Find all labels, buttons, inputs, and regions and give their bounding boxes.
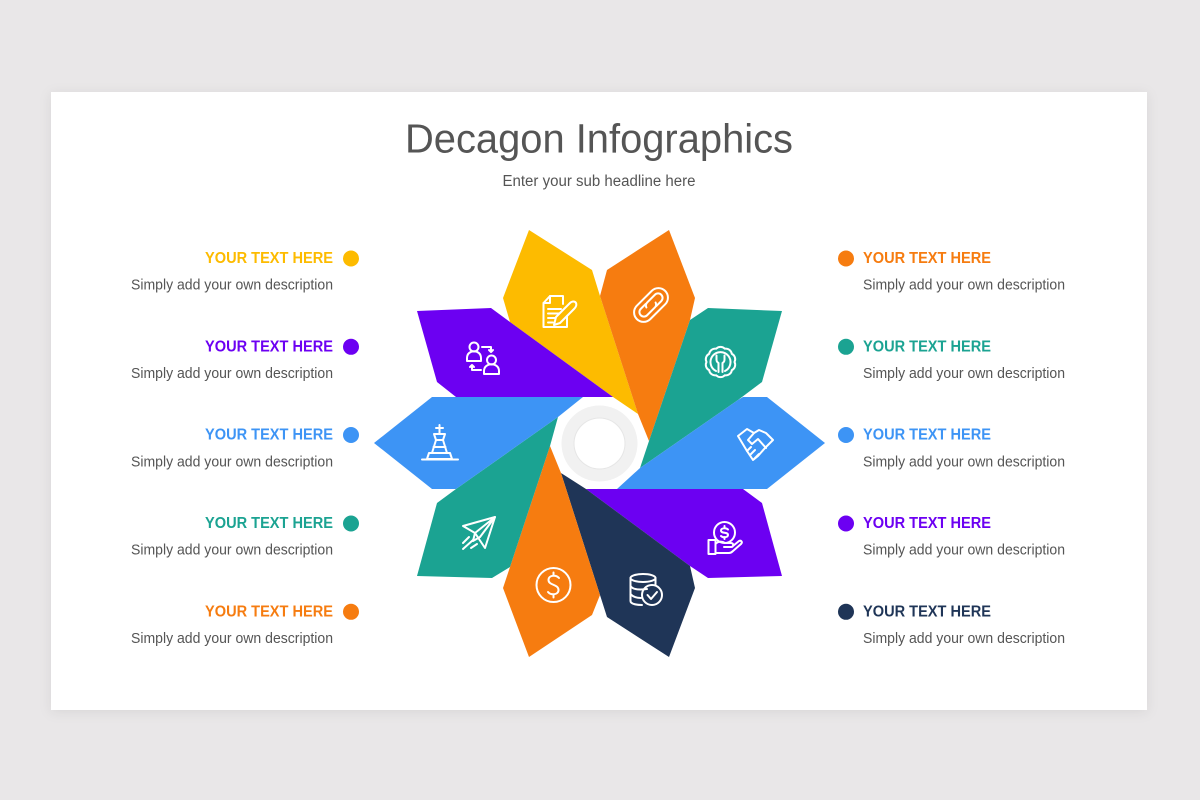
petal: purple upper left <box>417 308 613 397</box>
list item: right 4: Simply add your own description <box>863 542 1065 558</box>
list item: right 1: YOUR TEXT HERE <box>863 250 991 267</box>
petal: yellow <box>503 230 638 414</box>
list item: left 2 <box>131 338 359 382</box>
petal: blue left <box>374 397 583 489</box>
list item: right 3 <box>838 426 1065 470</box>
icon: chess king <box>422 425 458 460</box>
title: Decagon Infographics <box>405 116 793 162</box>
list item: right 5: YOUR TEXT HERE <box>863 604 991 620</box>
list item: right 4 <box>838 515 1065 558</box>
list item: left 3: YOUR TEXT HERE <box>205 426 333 444</box>
list item: left 2: YOUR TEXT HERE <box>205 338 333 356</box>
decagon petals chart <box>374 230 825 657</box>
list item: right 1: Simply add your own description <box>863 278 1065 294</box>
list item: left 1 <box>131 250 359 294</box>
icon: document and pencil <box>544 296 576 327</box>
subtitle: Enter your sub headline here <box>502 173 696 190</box>
petal: orange top <box>600 230 695 441</box>
list item: right 5 <box>838 604 1065 647</box>
list item: right 5: Simply add your own description <box>863 631 1065 647</box>
list item: left 1: Simply add your own description <box>131 278 333 294</box>
icon: dollar coin <box>536 568 570 602</box>
icon: gear and wrench <box>706 347 735 377</box>
icon: coin in hand <box>708 522 742 554</box>
list item: left 2: Simply add your own description <box>131 366 333 382</box>
list item: left 5: YOUR TEXT HERE <box>205 604 333 620</box>
icon: handshake <box>738 429 773 460</box>
petal: purple lower right <box>586 489 782 578</box>
panel: white slide <box>51 92 1147 710</box>
list item: right 1 <box>838 250 1065 294</box>
list item: right 3: Simply add your own description <box>863 454 1065 470</box>
icon: chain link <box>630 284 672 326</box>
list item: left 5: Simply add your own description <box>131 631 333 647</box>
icon: database check <box>630 574 662 605</box>
list item: right 2: YOUR TEXT HERE <box>863 338 991 356</box>
list item: left 3 <box>131 426 359 470</box>
list item: right 3: YOUR TEXT HERE <box>863 426 991 444</box>
list item: right 2: Simply add your own description <box>863 366 1065 382</box>
list item: left 5 <box>131 604 359 647</box>
petal: orange bottom <box>503 446 600 657</box>
icon: paper plane <box>463 517 495 549</box>
list item: left 4: Simply add your own description <box>131 542 333 558</box>
list item: left 3: Simply add your own description <box>131 454 333 470</box>
petal: navy <box>561 473 695 657</box>
petal: blue right <box>617 397 825 489</box>
petal: teal top right <box>640 308 782 468</box>
list item: left 1: YOUR TEXT HERE <box>205 250 333 267</box>
list item: right 2 <box>838 338 1065 382</box>
list item: left 4: YOUR TEXT HERE <box>205 515 333 532</box>
icon: people swap <box>467 342 499 374</box>
center ring <box>562 406 638 482</box>
list item: left 4 <box>131 515 359 558</box>
list item: right 4: YOUR TEXT HERE <box>863 515 991 532</box>
petal: teal lower left <box>417 417 558 578</box>
